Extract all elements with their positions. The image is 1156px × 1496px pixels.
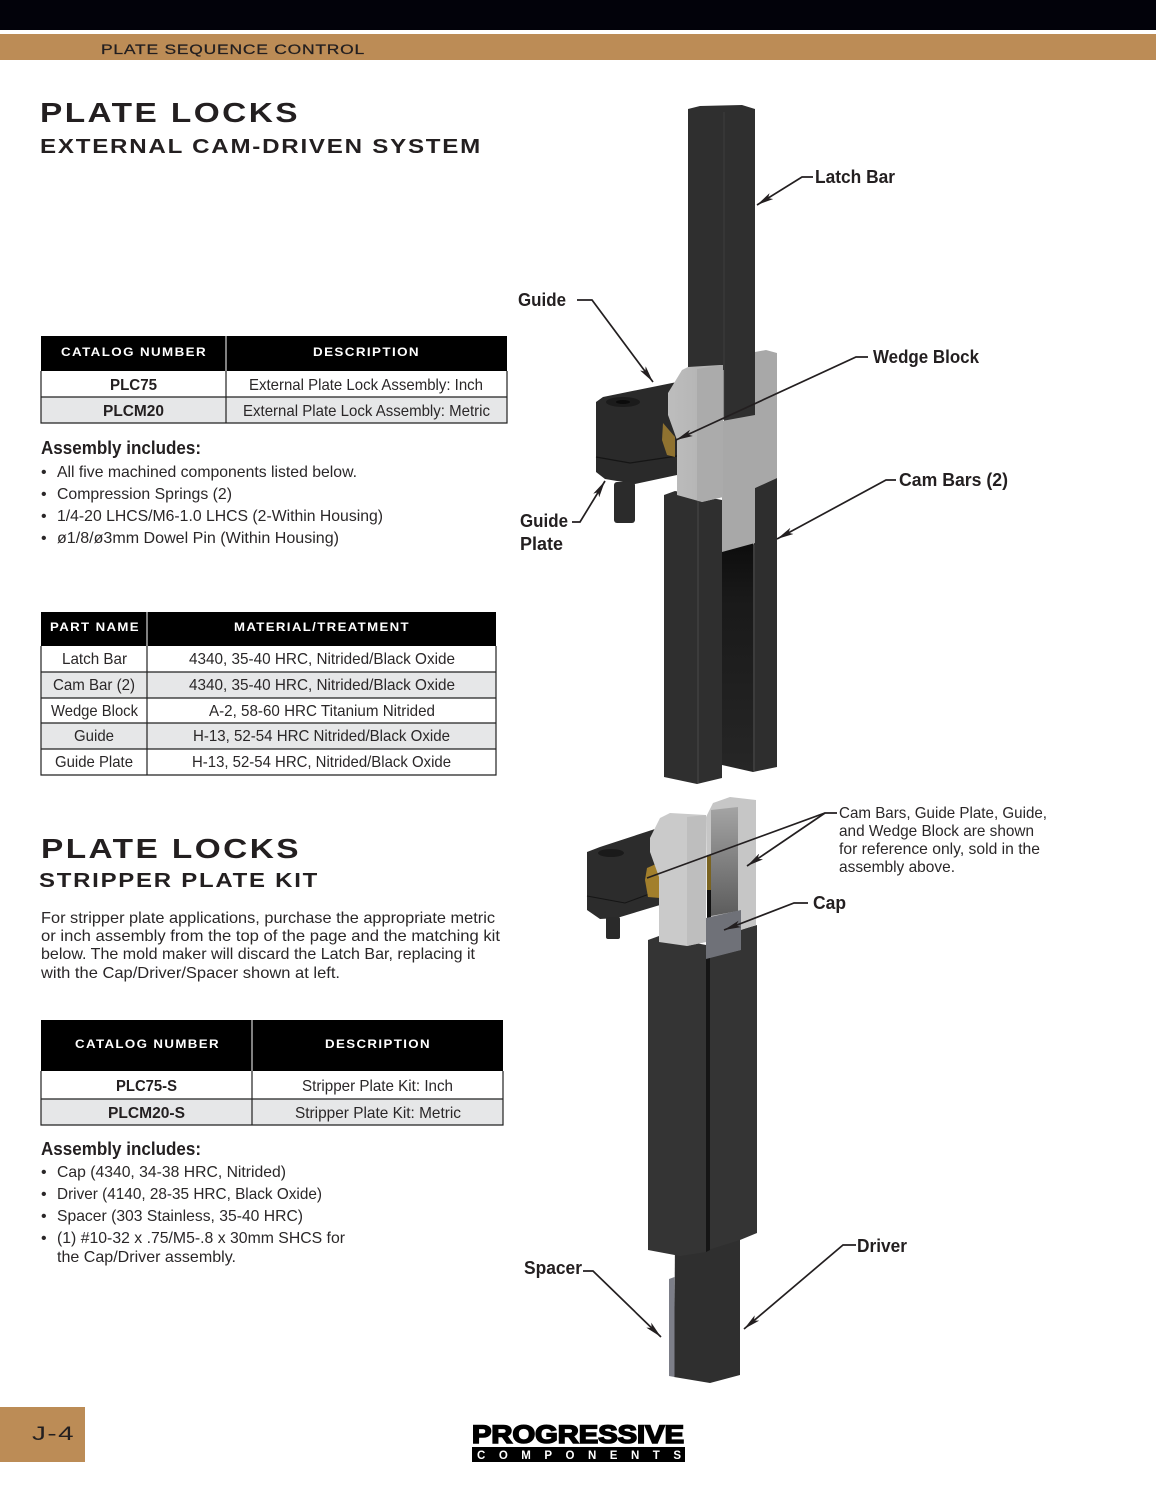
gap behind cam bars	[722, 540, 753, 772]
table: part materials: H-13, 52-54 HRC Nitrided/Black Oxide	[193, 728, 450, 745]
logo: progressive components: PROGRESSIVE	[472, 1421, 684, 1449]
text block: assembly includes: •	[41, 508, 47, 525]
heading: external cam-driven system	[40, 97, 482, 158]
callout arrow: driver	[744, 1245, 856, 1329]
label: guide plate: Guide	[520, 511, 568, 531]
text block: kit includes: the Cap/Driver assembly.	[57, 1249, 236, 1266]
logo: progressive components	[472, 1421, 685, 1462]
table: catalog numbers: PLC75	[110, 377, 157, 394]
callout arrow: cap	[724, 903, 808, 930]
callout arrows: reference components	[647, 813, 837, 878]
table: catalog numbers: External Plate Lock Assembly: Inch	[249, 377, 483, 394]
text block: kit includes: (1) #10-32 x .75/M5-.8 x 30mm SHCS for	[57, 1230, 346, 1247]
note: reference only: Cam Bars, Guide Plate, Guide,	[839, 805, 1047, 822]
label: guide plate	[520, 511, 568, 554]
section banner	[0, 34, 1156, 60]
text block: assembly includes: ø1/8/ø3mm Dowel Pin (Within Housing)	[57, 530, 339, 547]
note: reference only: and Wedge Block are shown	[839, 823, 1034, 840]
table: part materials: Cam Bar (2)	[53, 677, 135, 694]
table: part materials	[41, 612, 496, 775]
top black band	[0, 0, 1156, 30]
text block: assembly includes: 1/4-20 LHCS/M6-1.0 LHCS (2-Within Housing)	[57, 508, 383, 525]
text block: kit includes	[41, 1139, 346, 1266]
label: latch bar: Latch Bar	[815, 167, 895, 187]
callout arrow: latch bar	[757, 177, 813, 205]
text block: assembly includes: •	[41, 464, 47, 481]
text block: kit includes: Cap (4340, 34-38 HRC, Nitrided)	[57, 1164, 286, 1181]
guide	[668, 365, 723, 502]
table: stripper kit catalog numbers: PLCM20-S	[108, 1105, 185, 1122]
page number tab: J-4	[32, 1424, 75, 1445]
left bar	[648, 936, 706, 1256]
table: part materials: H-13, 52-54 HRC, Nitrided/Black Oxide	[192, 754, 451, 771]
label: guide plate: Plate	[520, 534, 563, 554]
text block: assembly includes: Assembly includes:	[41, 438, 201, 458]
table: part materials: Latch Bar	[62, 651, 128, 668]
label: wedge block: Wedge Block	[873, 347, 980, 367]
label: cap: Cap	[813, 893, 846, 913]
note: reference only: assembly above.	[839, 859, 955, 876]
label: driver: Driver	[857, 1236, 907, 1256]
text block: kit includes: •	[41, 1230, 47, 1247]
guide	[650, 813, 706, 946]
text block: kit includes: •	[41, 1208, 47, 1225]
left cam bar	[664, 491, 722, 784]
table: part materials: PART NAME	[50, 622, 140, 634]
table: catalog numbers: External Plate Lock Assembly: Metric	[243, 403, 490, 420]
cap	[706, 910, 741, 959]
heading: stripper plate kit: PLATE LOCKS	[41, 833, 301, 864]
driver	[674, 1225, 740, 1383]
guide housing	[596, 382, 677, 523]
text block: stripper plate intro	[40, 910, 501, 982]
logo: progressive components: COMPONENTS	[477, 1450, 681, 1462]
table: stripper kit catalog numbers: PLC75-S	[116, 1078, 177, 1095]
text block: stripper plate intro: For stripper plate applications, purchase the appropriate metric	[41, 910, 495, 927]
callout arrow: cam bars	[777, 480, 896, 539]
text block: assembly includes: All five machined components listed below.	[57, 464, 357, 481]
table: part materials: MATERIAL/TREATMENT	[234, 622, 410, 634]
label: cam bars: Cam Bars (2)	[899, 470, 1008, 490]
heading: external cam-driven system: EXTERNAL CAM-DRIVEN SYSTEM	[40, 135, 482, 158]
callout arrow: guide plate	[572, 481, 605, 522]
text block: kit includes: Assembly includes:	[41, 1139, 201, 1159]
table: part materials: 4340, 35-40 HRC, Nitrided/Black Oxide	[189, 651, 455, 668]
section banner: PLATE SEQUENCE CONTROL	[101, 42, 365, 57]
wedge block	[662, 423, 675, 457]
table: stripper kit catalog numbers: DESCRIPTION	[325, 1039, 431, 1051]
guide housing	[587, 829, 660, 939]
text block: kit includes: •	[41, 1164, 47, 1181]
text block: stripper plate intro: with the Cap/Driver/Spacer shown at left.	[40, 965, 340, 982]
text block: kit includes: Spacer (303 Stainless, 35-40 HRC)	[57, 1208, 303, 1225]
figure: stripper plate kit assembly	[587, 797, 757, 1383]
right bar	[708, 925, 757, 1250]
table: stripper kit catalog numbers: CATALOG NUMBER	[75, 1039, 220, 1051]
table: stripper kit catalog numbers: Stripper Plate Kit: Inch	[302, 1078, 453, 1095]
text block: assembly includes: Compression Springs (2)	[57, 486, 232, 503]
table: catalog numbers: DESCRIPTION	[313, 347, 420, 359]
table: stripper kit catalog numbers: Stripper Plate Kit: Metric	[295, 1105, 461, 1122]
text block: assembly includes: •	[41, 486, 47, 503]
callout arrow: spacer	[583, 1271, 661, 1337]
table: part materials: Guide Plate	[55, 754, 133, 771]
callout arrow: wedge block	[676, 357, 868, 440]
seam	[706, 950, 710, 1252]
table: part materials: Wedge Block	[51, 703, 139, 720]
text block: stripper plate intro: or inch assembly from the top of the page and the matching kit	[41, 928, 501, 945]
table: catalog numbers: CATALOG NUMBER	[61, 347, 207, 359]
note: reference only	[839, 805, 1047, 876]
text block: assembly includes: •	[41, 530, 47, 547]
heading: stripper plate kit	[39, 833, 319, 892]
label: spacer: Spacer	[524, 1258, 582, 1278]
latch bar	[688, 105, 755, 421]
text block: assembly includes	[41, 438, 383, 547]
text block: stripper plate intro: below. The mold maker will discard the Latch Bar, replacing it	[41, 946, 476, 963]
note: reference only: for reference only, sold in the	[839, 841, 1040, 858]
table: part materials: 4340, 35-40 HRC, Nitrided/Black Oxide	[189, 677, 455, 694]
table: part materials: A-2, 58-60 HRC Titanium Nitrided	[209, 703, 435, 720]
figure: full plate lock assembly	[596, 105, 777, 784]
text block: kit includes: Driver (4140, 28-35 HRC, Black Oxide)	[57, 1186, 322, 1203]
right cam bar top	[706, 797, 756, 930]
text block: kit includes: •	[41, 1186, 47, 1203]
table: catalog numbers: PLCM20	[103, 403, 164, 420]
table: part materials: Guide	[74, 728, 114, 745]
callout arrow: guide	[577, 300, 653, 382]
spacer	[669, 1277, 674, 1377]
table: stripper kit catalog numbers	[41, 1020, 503, 1125]
table: catalog numbers	[41, 336, 507, 423]
wedge block	[645, 864, 660, 898]
heading: stripper plate kit: STRIPPER PLATE KIT	[39, 869, 319, 892]
right cam bar	[753, 350, 777, 772]
label: guide: Guide	[518, 290, 566, 310]
center light cam section	[722, 415, 755, 552]
page number tab	[0, 1407, 85, 1462]
heading: external cam-driven system: PLATE LOCKS	[40, 97, 300, 128]
